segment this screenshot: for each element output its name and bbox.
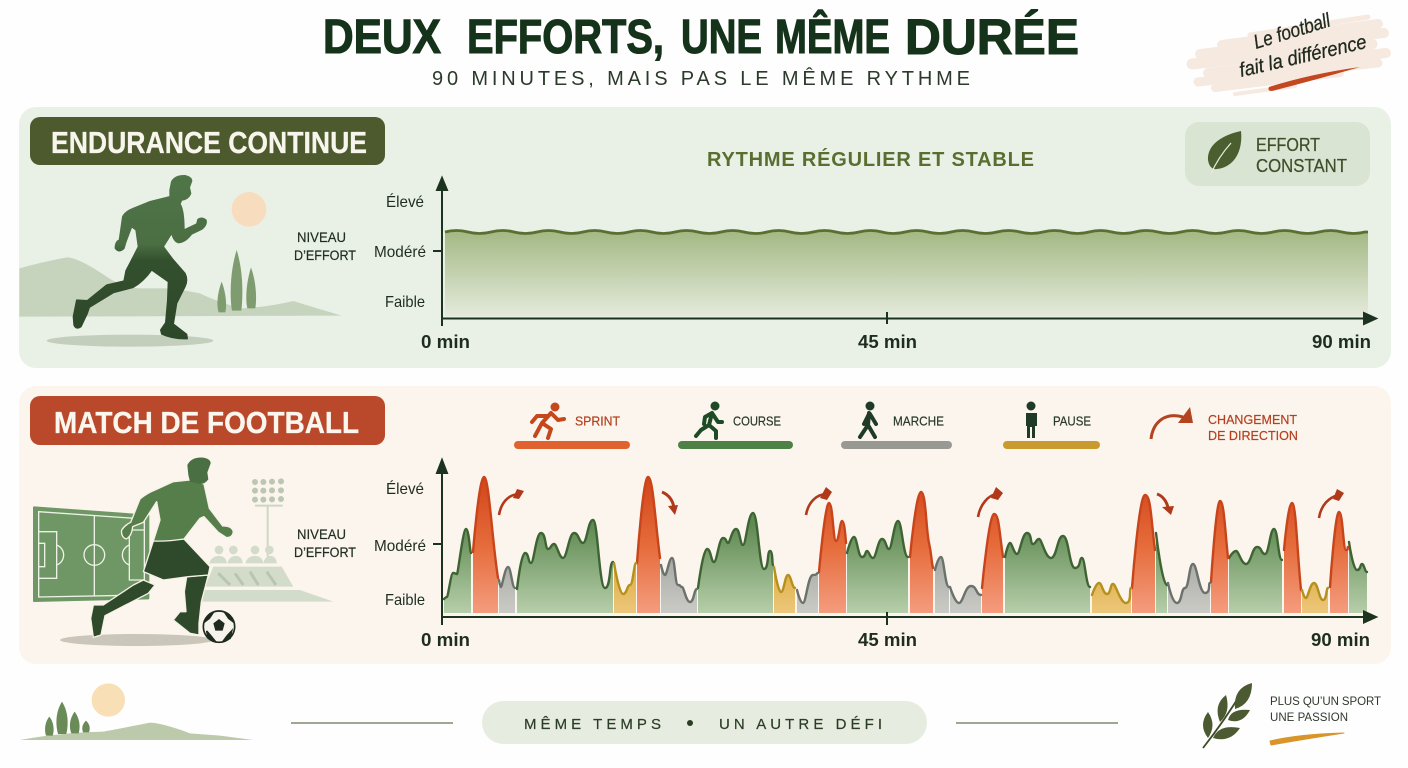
area chart: variable effort fills bbox=[444, 477, 1367, 613]
axis title: NIVEAU bbox=[297, 229, 346, 245]
x axis labels: 90 min bbox=[1311, 630, 1370, 650]
chart heading: RYTHME RÉGULIER ET STABLE bbox=[707, 148, 1034, 171]
y axis labels bbox=[374, 479, 426, 609]
title bbox=[323, 9, 1079, 65]
icon: olive branch bbox=[1203, 683, 1252, 748]
tagline: plus qu'un sport, une passion bbox=[1270, 696, 1381, 745]
tagline: plus qu'un sport, une passion: UNE PASSION bbox=[1270, 712, 1348, 724]
subtitle: 90 MINUTES, MAIS PAS LE MÊME RYTHME bbox=[432, 67, 970, 90]
legend item: changement de direction bbox=[1151, 407, 1298, 443]
footer pill: même temps, un autre défi: MÊME TEMPS bbox=[524, 716, 661, 733]
legend item: marche: MARCHE bbox=[893, 414, 944, 428]
footer divider lines bbox=[291, 722, 1118, 724]
panel: endurance continue bbox=[19, 107, 1391, 368]
x axis labels bbox=[421, 332, 1371, 352]
area chart: variable effort lines bbox=[444, 477, 1367, 603]
x axis labels: 90 min bbox=[1312, 332, 1371, 352]
tagline: plus qu'un sport, une passion: PLUS QU’UN SPORT bbox=[1270, 696, 1381, 708]
legend item: marche bbox=[841, 402, 952, 449]
x axis labels: 45 min bbox=[858, 332, 917, 352]
legend item: sprint bbox=[514, 402, 630, 449]
legend item: pause: PAUSE bbox=[1053, 414, 1091, 428]
badge: effort constant bbox=[1185, 122, 1370, 186]
heading: endurance continue bbox=[30, 117, 385, 165]
title: DURÉE bbox=[905, 9, 1079, 65]
footer landscape bbox=[20, 683, 253, 740]
title: DEUX bbox=[323, 11, 441, 64]
footer pill: même temps, un autre défi: UN AUTRE DÉFI bbox=[719, 716, 882, 733]
callout: le football fait la différence: fait la différence bbox=[1237, 31, 1369, 82]
badge: effort constant: CONSTANT bbox=[1256, 156, 1347, 176]
illustration: footballer with pitch and stadium bbox=[34, 458, 333, 646]
axis title bbox=[294, 526, 356, 560]
x axis labels: 45 min bbox=[858, 630, 917, 650]
legend bbox=[514, 402, 1298, 449]
badge: effort constant: EFFORT bbox=[1256, 135, 1320, 155]
axis title: NIVEAU bbox=[297, 526, 346, 542]
legend item: pause bbox=[1003, 402, 1100, 449]
x axis labels bbox=[421, 630, 1370, 650]
illustration: runner in landscape bbox=[19, 176, 342, 347]
callout: le football fait la différence: Le football bbox=[1251, 10, 1333, 54]
heading: match de football bbox=[30, 396, 385, 445]
y axis labels bbox=[374, 192, 426, 311]
y axis labels: Faible bbox=[385, 294, 425, 311]
legend item: changement de direction: DE DIRECTION bbox=[1208, 428, 1298, 443]
chart axes bbox=[433, 460, 1376, 625]
axis title: D’EFFORT bbox=[294, 247, 356, 263]
x axis labels: 0 min bbox=[421, 630, 470, 650]
footer pill: même temps, un autre défi bbox=[482, 701, 927, 744]
legend item: changement de direction: CHANGEMENT bbox=[1208, 412, 1297, 427]
area chart: constant effort bbox=[445, 230, 1368, 316]
heading: match de football: MATCH DE FOOTBALL bbox=[54, 405, 359, 440]
y axis labels: Modéré bbox=[374, 244, 426, 261]
axis title bbox=[294, 229, 356, 263]
y axis labels: Modéré bbox=[374, 538, 426, 555]
title: MÊME bbox=[775, 9, 890, 64]
y axis labels: Élevé bbox=[386, 479, 424, 498]
chart axes bbox=[433, 178, 1376, 326]
y axis labels: Élevé bbox=[386, 192, 424, 211]
direction change arrows bbox=[499, 487, 1344, 518]
axis title: D’EFFORT bbox=[294, 544, 356, 560]
legend item: course bbox=[678, 402, 793, 449]
legend item: sprint: SPRINT bbox=[575, 414, 620, 428]
callout: le football fait la différence bbox=[1192, 10, 1386, 94]
panel: match de football bbox=[19, 386, 1391, 664]
heading: endurance continue: ENDURANCE CONTINUE bbox=[51, 125, 367, 160]
legend item: course: COURSE bbox=[733, 414, 781, 428]
x axis labels: 0 min bbox=[421, 332, 470, 352]
title: EFFORTS, bbox=[467, 11, 664, 64]
y axis labels: Faible bbox=[385, 592, 425, 609]
title: UNE bbox=[681, 11, 762, 64]
